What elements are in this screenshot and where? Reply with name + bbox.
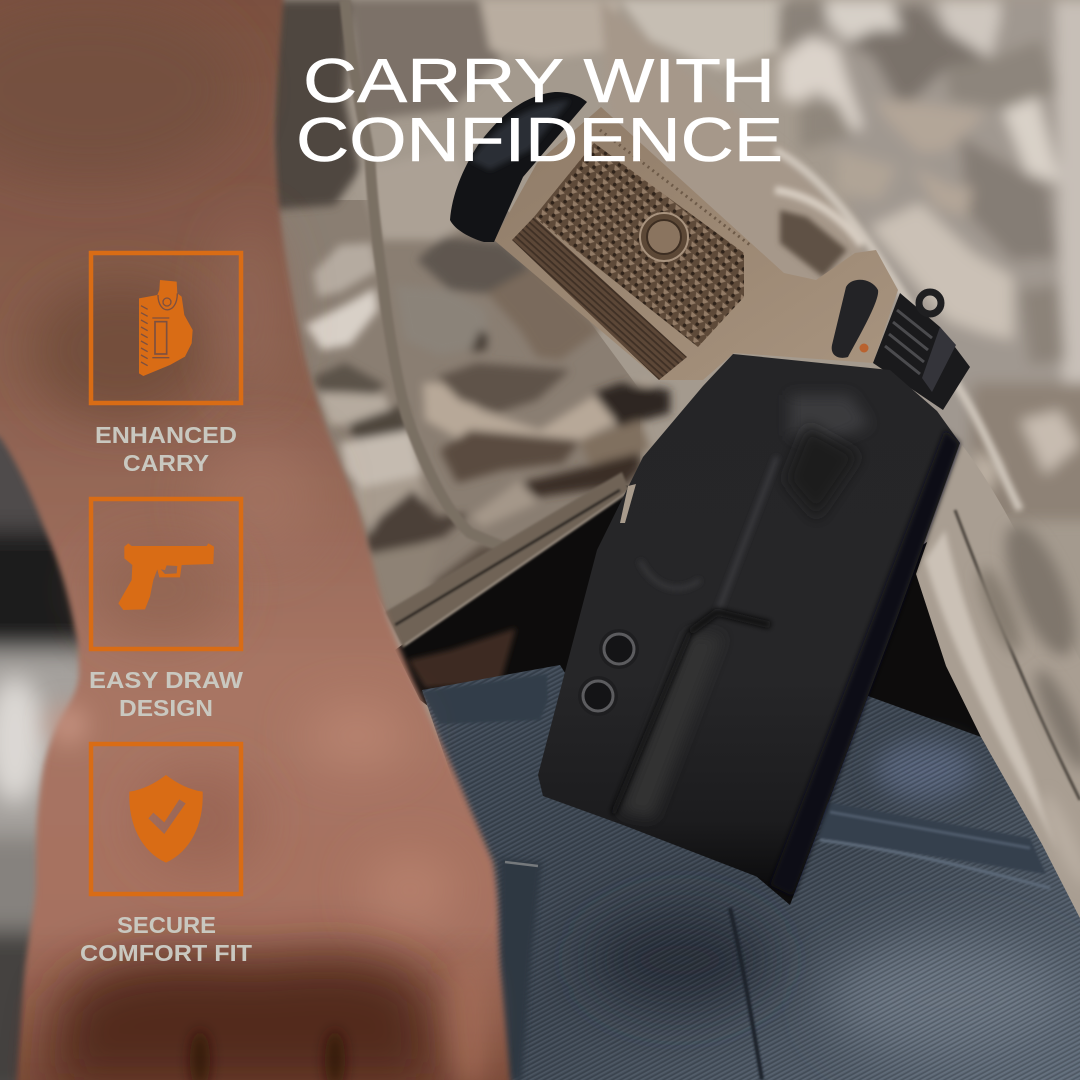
icon: pistol — [118, 543, 214, 610]
feature: enhanced carry — [91, 253, 241, 476]
pistol frame — [494, 107, 898, 380]
photo: blurred left background — [0, 420, 100, 1080]
pistol logo — [640, 213, 688, 261]
icon box — [91, 744, 241, 894]
pistol base plate — [450, 92, 587, 242]
icon box — [91, 499, 241, 649]
photo: draped shirt on right — [916, 445, 1080, 918]
pistol grip texture — [534, 143, 744, 347]
photo: jeans — [422, 665, 1080, 1080]
title — [296, 47, 783, 175]
orange pin — [860, 344, 868, 352]
label: DESIGN — [119, 695, 213, 721]
photo: shirt hem — [385, 472, 630, 648]
feature: easy draw design — [89, 499, 244, 721]
icon: holster — [139, 280, 193, 376]
label: CARRY — [123, 450, 209, 476]
title: CARRY WITH — [303, 47, 775, 116]
holster screw — [599, 629, 639, 669]
photo: forearm and hand — [0, 0, 511, 1080]
label: COMFORT FIT — [80, 940, 253, 966]
feature: secure comfort fit — [80, 744, 253, 966]
pistol grip striations — [512, 217, 687, 380]
label: SECURE — [117, 912, 216, 938]
icon: shield — [129, 775, 203, 863]
label — [95, 422, 237, 476]
label: EASY DRAW — [89, 667, 244, 693]
photo: holster — [538, 354, 960, 896]
label: ENHANCED — [95, 422, 237, 448]
pistol lever — [832, 280, 878, 358]
photo: dark waistband shadow — [395, 485, 990, 920]
shirt camo left — [270, 0, 880, 610]
pistol slide — [873, 293, 970, 410]
photo: pistol — [450, 92, 970, 410]
shirt fleck beside holster — [620, 484, 636, 523]
label — [89, 667, 244, 721]
shirt seam — [345, 0, 503, 547]
pistol rear sight — [919, 292, 941, 314]
label — [80, 912, 253, 966]
photo: belt label — [408, 628, 516, 688]
icon box — [91, 253, 241, 403]
title: CONFIDENCE — [296, 106, 783, 175]
shirt camo right — [780, 0, 1080, 520]
holster screw — [578, 676, 618, 716]
holster moulding highlights — [613, 395, 870, 818]
shirt fold — [775, 150, 1020, 510]
